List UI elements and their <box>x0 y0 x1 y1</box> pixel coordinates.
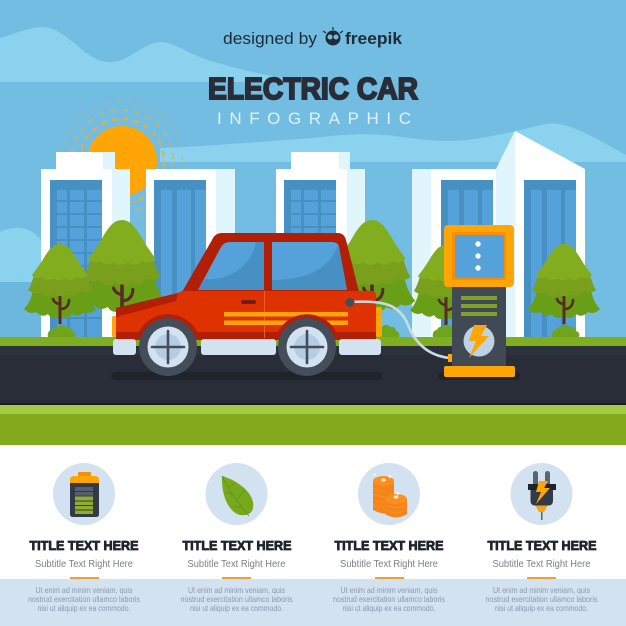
credit line: freepik <box>345 29 403 48</box>
grass strip <box>0 337 626 346</box>
icon: freepik mascot <box>323 27 343 46</box>
subheading: Subtitle Text Right Here <box>340 558 438 570</box>
body text: nisi ut aliquip ex ea commodo. <box>190 603 283 613</box>
sun <box>62 101 182 221</box>
subheading: Subtitle Text Right Here <box>188 558 286 570</box>
column 3 <box>333 463 445 613</box>
hills: middle band <box>160 123 626 162</box>
credit line <box>223 27 403 48</box>
body text: Ut enim ad minim veniam, quis <box>340 585 438 595</box>
road <box>0 346 626 405</box>
car shadow <box>111 372 382 380</box>
pale blue footer <box>0 579 626 626</box>
building 2 <box>146 169 235 337</box>
credit line: designed by <box>223 29 318 48</box>
body text <box>28 585 140 613</box>
body text: nisi ut aliquip ex ea commodo. <box>38 603 130 613</box>
body text <box>180 585 292 613</box>
building 4 <box>412 131 585 337</box>
subheading: Subtitle Text Right Here <box>35 558 133 570</box>
divider <box>222 577 251 579</box>
body text <box>486 585 598 613</box>
body text: nostrud exercitation ullamco laboris <box>28 594 140 604</box>
subtitle: INFOGRAPHIC <box>217 109 411 128</box>
charging station <box>444 225 515 377</box>
divider <box>70 577 99 579</box>
divider <box>375 577 404 579</box>
body text <box>333 585 445 613</box>
electric car <box>112 233 382 376</box>
building 3 <box>276 152 365 337</box>
hills: upper left <box>0 27 300 82</box>
heading: TITLE TEXT HERE <box>488 538 597 553</box>
charging cable <box>346 298 453 362</box>
column 2 <box>180 463 292 613</box>
body text: nostrud exercitation ullamco laboris <box>180 594 292 604</box>
heading: TITLE TEXT HERE <box>334 538 444 553</box>
column 1 <box>28 463 140 613</box>
subheading: Subtitle Text Right Here <box>492 558 591 570</box>
body text: Ut enim ad minim veniam, quis <box>493 585 590 595</box>
white panel <box>0 445 626 579</box>
body text: nostrud exercitation ullamco laboris <box>486 594 598 604</box>
hills: lower left <box>0 228 50 282</box>
trees <box>24 220 600 337</box>
body text: nisi ut aliquip ex ea commodo. <box>495 603 588 613</box>
divider <box>527 577 556 579</box>
heading: TITLE TEXT HERE <box>30 538 139 553</box>
building 1 <box>41 152 130 337</box>
front lawn <box>0 405 626 445</box>
column 4 <box>486 463 598 613</box>
body text: Ut enim ad minim veniam, quis <box>188 585 285 595</box>
heading: TITLE TEXT HERE <box>182 538 292 553</box>
title: ELECTRIC CAR <box>208 71 418 106</box>
body text: nostrud exercitation ullamco laboris <box>333 594 445 604</box>
body text: Ut enim ad minim veniam, quis <box>36 585 132 595</box>
sky background <box>0 0 626 340</box>
icon: leaf <box>206 463 268 525</box>
icon: coins <box>358 463 420 525</box>
charging station shadow <box>438 372 520 380</box>
icon: plug <box>510 463 572 525</box>
body text: nisi ut aliquip ex ea commodo. <box>342 603 436 613</box>
icon: battery <box>53 463 115 525</box>
